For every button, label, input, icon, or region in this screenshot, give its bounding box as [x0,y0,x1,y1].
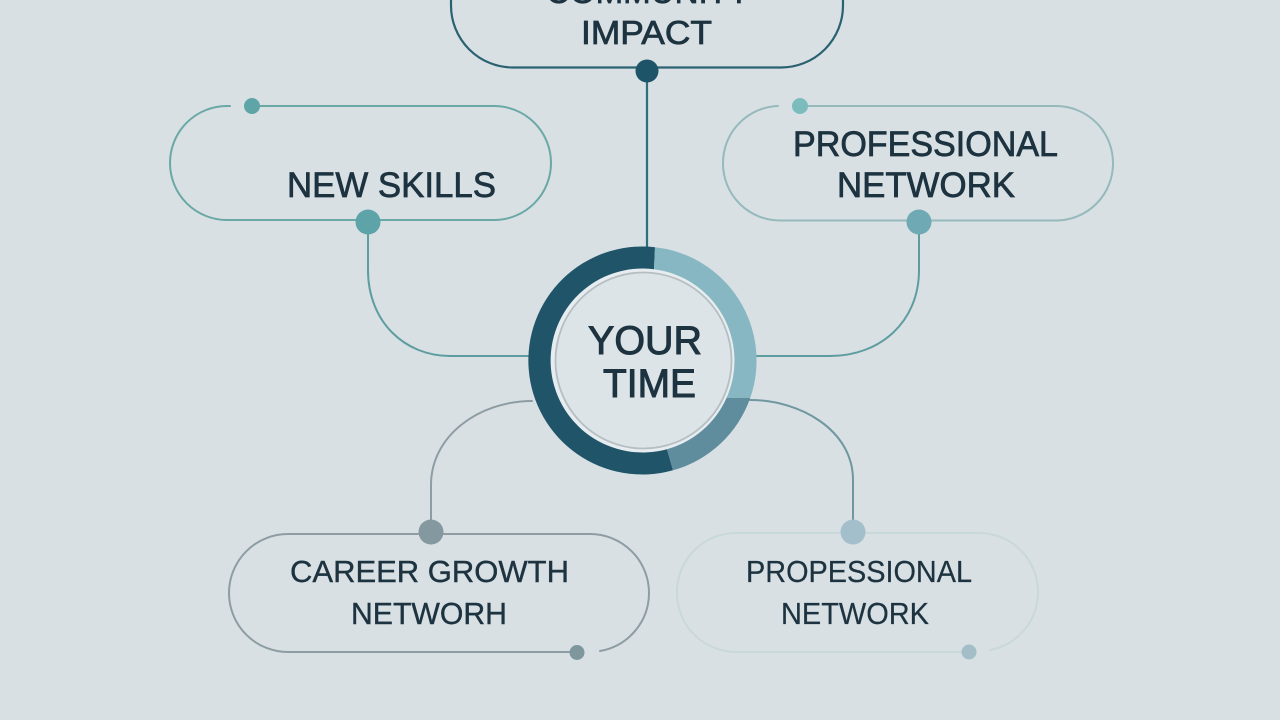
small dot [962,644,976,660]
label: network: NETWORK [781,596,929,631]
pill outline [677,533,1038,652]
inner disc [550,268,734,452]
label: your: YOUR [588,319,702,363]
connector: community impact to center [646,71,648,250]
small dot [792,98,808,114]
node dot [636,60,658,82]
label: professional: PROFESSIONAL [793,125,1058,164]
label: network: NETWORK [837,166,1015,205]
connector: professional network to center [755,222,919,356]
node dot [418,520,444,544]
connector: lower professional network to center [750,400,853,532]
panel: professional network [723,98,1113,234]
connector: new skills to center [368,222,530,356]
ring segment: dark [528,246,673,474]
small dot [244,98,260,114]
pill outline [723,106,1113,220]
panel: career growth network [229,520,649,660]
ring segment: medium [667,398,750,470]
pill outline [451,0,843,68]
connector: career growth to center [431,401,532,532]
label: time: TIME [603,362,696,406]
center: your time ring [528,246,757,474]
pill outline [229,534,649,652]
label: impact: IMPACT [581,14,712,51]
node dot [356,210,380,234]
panel: lower professional network [677,520,1038,660]
small dot [570,645,584,660]
panel: community impact [451,0,843,82]
node dot [906,210,932,234]
label: networh: NETWORH [351,596,507,631]
label: propessional: PROPESSIONAL [746,554,972,589]
node dot [840,520,866,544]
label: new skills: NEW SKILLS [287,166,496,205]
inner ring [556,272,732,448]
panel: new skills [170,98,551,234]
label: career growth: CAREER GROWTH [290,554,569,589]
ring segment: light [654,247,757,398]
pill outline [170,106,551,220]
